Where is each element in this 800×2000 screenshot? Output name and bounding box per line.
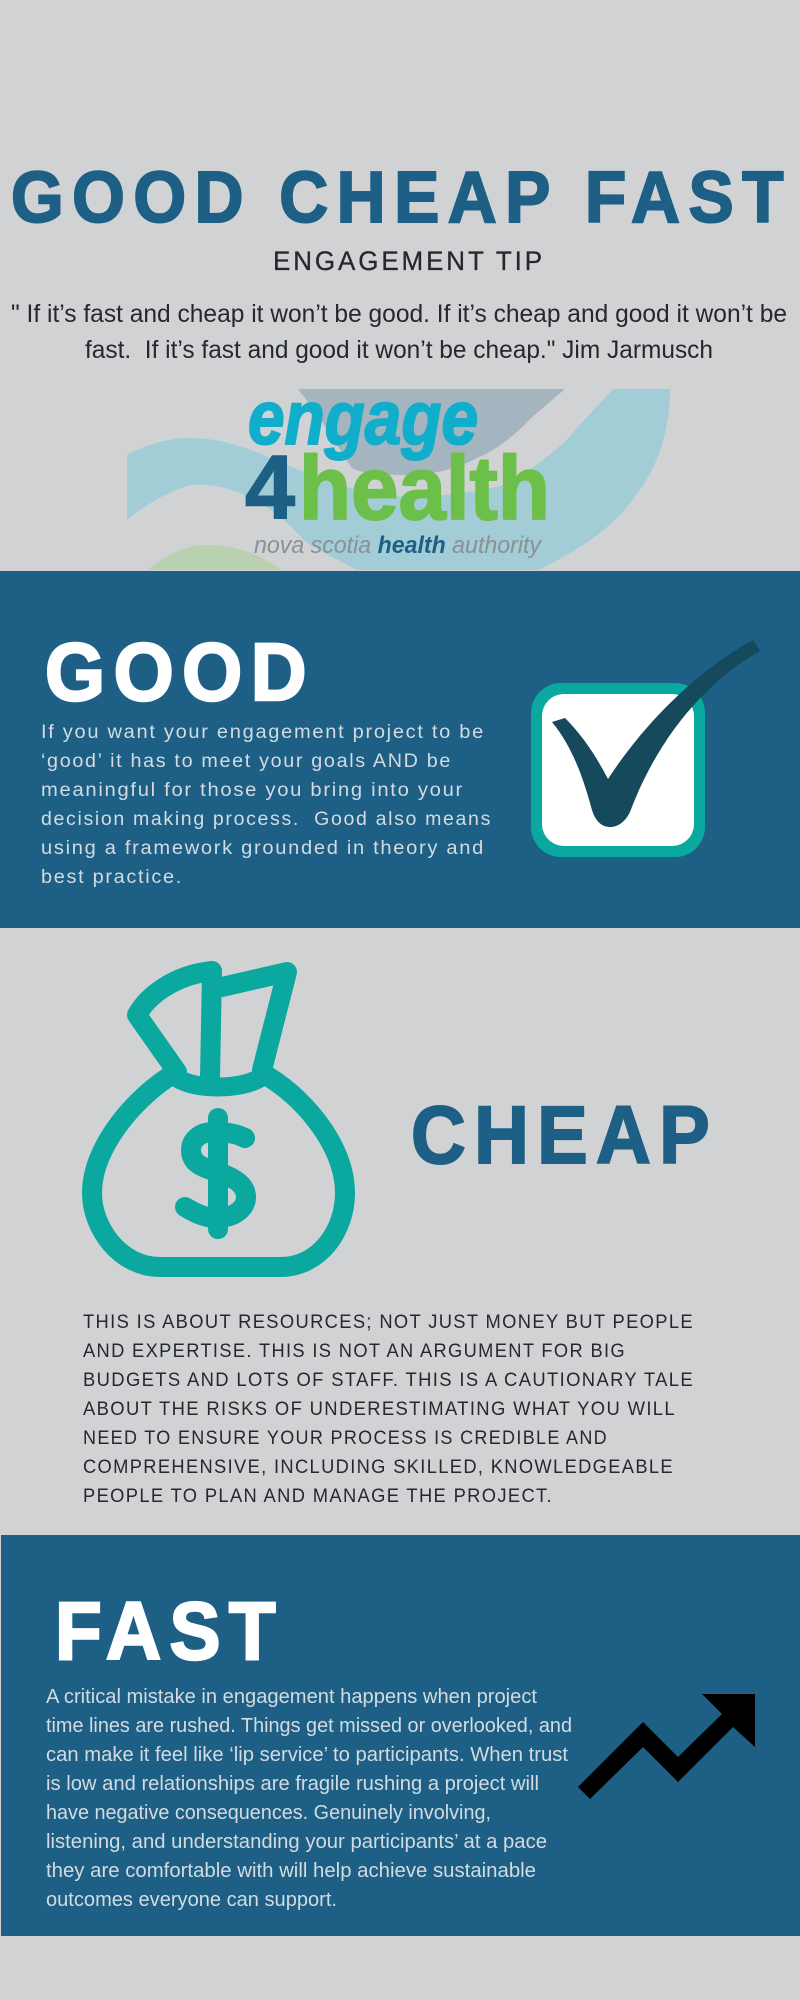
- good body text: decision making process. Good also means: [41, 809, 492, 830]
- fast body text: is low and relationships are fragile rushing a project will: [46, 1773, 539, 1795]
- cheap body text: AND EXPERTISE. THIS IS NOT AN ARGUMENT FOR BIG: [83, 1341, 626, 1362]
- good body text: meaningful for those you bring into your: [41, 780, 464, 801]
- logo wordmark: engage: engage: [248, 376, 478, 461]
- logo wordmark: health: health: [299, 439, 550, 539]
- icon: checkbox with tick: [531, 640, 760, 857]
- good body text: ‘good’ it has to meet your goals AND be: [41, 751, 452, 772]
- cheap body text: [83, 1312, 694, 1507]
- cheap body text: ABOUT THE RISKS OF UNDERESTIMATING WHAT YOU WILL: [83, 1399, 676, 1420]
- icon: rising arrow: [578, 1694, 755, 1799]
- fast heading: FAST: [55, 1586, 284, 1677]
- fast body text: they are comfortable with will help achieve sustainable: [46, 1860, 536, 1882]
- icon: money bag: [92, 971, 345, 1267]
- good heading: GOOD: [45, 627, 315, 718]
- cheap body text: THIS IS ABOUT RESOURCES; NOT JUST MONEY BUT PEOPLE: [83, 1312, 694, 1333]
- panel: good: [0, 571, 800, 928]
- subtitle: ENGAGEMENT TIP: [273, 246, 545, 276]
- panel: cheap: [83, 971, 718, 1507]
- fast body text: listening, and understanding your participants’ at a pace: [46, 1831, 547, 1853]
- fast body text: can make it feel like ‘lip service’ to participants. When trust: [46, 1744, 568, 1766]
- good body text: using a framework grounded in theory and: [41, 838, 485, 859]
- logo background swooshes: [127, 389, 670, 570]
- quote: [11, 300, 787, 364]
- cheap body text: COMPREHENSIVE, INCLUDING SKILLED, KNOWLEDGEABLE: [83, 1457, 674, 1478]
- fast body text: [46, 1686, 572, 1911]
- fast body text: time lines are rushed. Things get missed or overlooked, and: [46, 1715, 572, 1737]
- fast body text: have negative consequences. Genuinely involving,: [46, 1802, 491, 1824]
- quote: " If it’s fast and cheap it won’t be good. If it’s cheap and good it won’t be: [11, 300, 787, 328]
- panel: fast: [1, 1535, 800, 1936]
- good body text: best practice.: [41, 867, 183, 888]
- quote: fast. If it’s fast and good it won’t be cheap." Jim Jarmusch: [85, 336, 713, 364]
- cheap body text: NEED TO ENSURE YOUR PROCESS IS CREDIBLE AND: [83, 1428, 608, 1449]
- cheap body text: PEOPLE TO PLAN AND MANAGE THE PROJECT.: [83, 1486, 553, 1507]
- fast body text: outcomes everyone can support.: [46, 1889, 337, 1911]
- header: [11, 158, 792, 364]
- fast body text: A critical mistake in engagement happens when project: [46, 1686, 537, 1708]
- logo: engage4health: [127, 376, 670, 570]
- logo numeral: 4: 4: [245, 438, 295, 538]
- logo tagline: nova scotia health authority: [254, 532, 543, 559]
- cheap body text: BUDGETS AND LOTS OF STAFF. THIS IS A CAUTIONARY TALE: [83, 1370, 694, 1391]
- cheap heading: CHEAP: [411, 1090, 718, 1181]
- good body text: If you want your engagement project to be: [41, 722, 485, 743]
- good body text: [41, 722, 492, 888]
